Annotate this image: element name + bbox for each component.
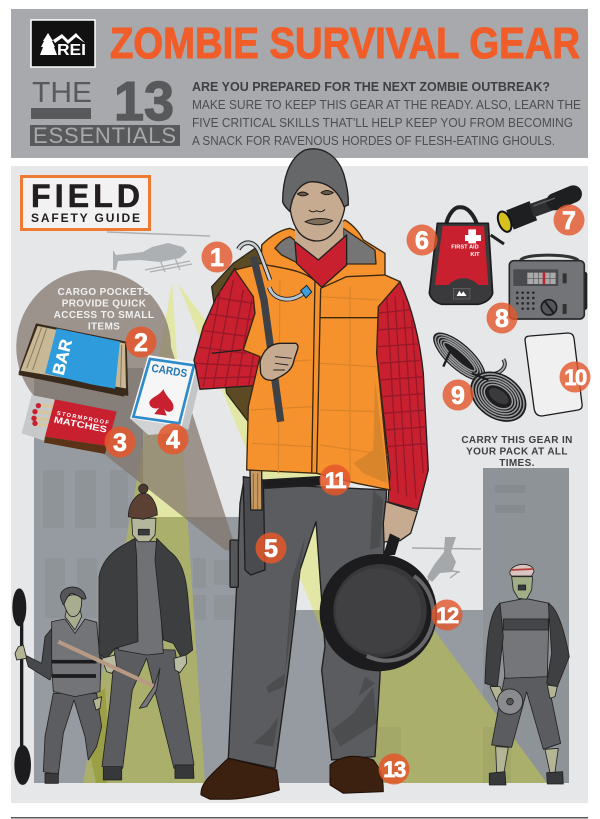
hero: orange vest bbox=[235, 220, 400, 490]
gear: cast iron skillet bbox=[320, 533, 437, 671]
hero: pants bbox=[228, 470, 387, 768]
hero: boots bbox=[201, 756, 383, 799]
badge 9: 9 bbox=[451, 382, 465, 410]
gear: first aid kit bbox=[429, 207, 504, 304]
badge 6 bbox=[406, 224, 438, 256]
badge 10: 10 bbox=[564, 365, 587, 390]
badge 2 bbox=[126, 326, 156, 358]
hero: face and beanie bbox=[283, 149, 348, 241]
badge 7: 7 bbox=[562, 207, 576, 235]
caption: carry this gear: CARRY THIS GEAR IN bbox=[461, 435, 573, 446]
badge 2: 2 bbox=[134, 329, 148, 357]
hero: left shirt sleeve bbox=[194, 268, 264, 389]
gear: emergency card bbox=[525, 333, 582, 416]
gear: storm proof matches bbox=[22, 395, 117, 454]
badge 8 bbox=[486, 302, 518, 334]
gear: first aid kit: FIRST AID bbox=[451, 245, 479, 251]
caption: carry this gear: YOUR PACK AT ALL bbox=[466, 446, 568, 458]
REI logo: REI bbox=[57, 42, 86, 59]
city buildings bbox=[34, 368, 569, 783]
the 13 essentials lockup: THE bbox=[32, 77, 92, 109]
zombie: paddle bbox=[12, 588, 31, 785]
badge 13: 13 bbox=[383, 757, 406, 782]
zombie: background yellow figure bbox=[88, 688, 108, 783]
number badges bbox=[104, 204, 590, 784]
gear: crank radio bbox=[509, 255, 587, 319]
hero: ice axe and hydration tube bbox=[238, 243, 312, 422]
helicopter right bbox=[412, 537, 481, 583]
badge 5: 5 bbox=[264, 535, 278, 563]
badge 8: 8 bbox=[495, 305, 509, 333]
panel label: cargo pockets: CARGO POCKETS bbox=[58, 287, 150, 298]
gear: first aid kit: KIT bbox=[470, 252, 480, 258]
hero: backpack bbox=[212, 248, 285, 428]
gear: storm proof matches: MATCHES bbox=[53, 414, 108, 435]
gear: rope coil bbox=[426, 325, 536, 432]
hero: neck and collar bbox=[295, 220, 347, 287]
badge 10 bbox=[560, 362, 590, 392]
zombie: right figure with wheel bbox=[485, 564, 569, 785]
olive searchlight beams over buildings bbox=[83, 447, 547, 783]
badge 7 bbox=[554, 204, 584, 236]
badge 9 bbox=[442, 380, 474, 410]
intro text bbox=[192, 79, 581, 148]
hero: right hand bbox=[383, 502, 417, 542]
badge 5 bbox=[256, 532, 286, 564]
gear: playing cards bbox=[130, 355, 202, 435]
intro text: FIVE CRITICAL SKILLS THAT'LL HELP KEEP YOU FROM BECOMING bbox=[192, 115, 573, 130]
the 13 essentials lockup bbox=[30, 70, 180, 148]
zombie: life vest figure bbox=[15, 587, 102, 783]
caption: carry this gear: TIMES. bbox=[499, 458, 535, 469]
REI logo bbox=[31, 20, 95, 67]
badge 1 bbox=[202, 242, 232, 272]
field safety guide badge bbox=[22, 176, 150, 230]
badge 6: 6 bbox=[415, 227, 429, 255]
gear: snack bar: BAR bbox=[49, 337, 76, 377]
badge 3: 3 bbox=[113, 429, 127, 457]
badge 4: 4 bbox=[166, 426, 180, 454]
zombie: tall figure with beanie bbox=[58, 484, 194, 780]
helicopter left bbox=[107, 232, 210, 272]
badge 1: 1 bbox=[210, 244, 224, 272]
intro text: A SNACK FOR RAVENOUS HORDES OF FLESH-EATING GHOULS. bbox=[192, 133, 555, 148]
intro text: ARE YOU PREPARED FOR THE NEXT ZOMBIE OUTBREAK? bbox=[192, 79, 550, 94]
pale searchlight beams bbox=[83, 282, 547, 783]
header panel bbox=[11, 9, 588, 158]
caption: carry this gear bbox=[461, 435, 573, 469]
badge 13 bbox=[378, 754, 410, 784]
badge 12: 12 bbox=[436, 603, 459, 628]
field safety guide badge: SAFETY GUIDE bbox=[31, 211, 140, 225]
hero: left hand bbox=[260, 343, 298, 380]
the 13 essentials lockup: 13 bbox=[114, 70, 174, 132]
panel label: cargo pockets: ACCESS TO SMALL bbox=[54, 310, 154, 321]
badge 11: 11 bbox=[325, 468, 346, 493]
gear: flashlight bbox=[495, 194, 573, 234]
badge 4 bbox=[158, 424, 188, 454]
the 13 essentials lockup: ESSENTIALS bbox=[33, 123, 176, 148]
gear: storm proof matches: STORMPROOF bbox=[56, 411, 110, 427]
gear: snack bar bbox=[18, 323, 128, 397]
panel label: cargo pockets bbox=[54, 287, 154, 332]
badge 11 bbox=[320, 464, 350, 496]
panel label: cargo pockets: PROVIDE QUICK bbox=[62, 298, 147, 310]
field safety guide badge: FIELD bbox=[31, 178, 140, 214]
hero: right shirt sleeve bbox=[377, 282, 429, 510]
badge 3 bbox=[104, 426, 136, 458]
main panel background bbox=[11, 166, 588, 803]
magnifier callout wedge bbox=[16, 270, 237, 552]
badge 12 bbox=[432, 600, 462, 630]
panel label: cargo pockets: ITEMS bbox=[88, 322, 120, 332]
gear: playing cards: CARDS bbox=[151, 363, 188, 380]
